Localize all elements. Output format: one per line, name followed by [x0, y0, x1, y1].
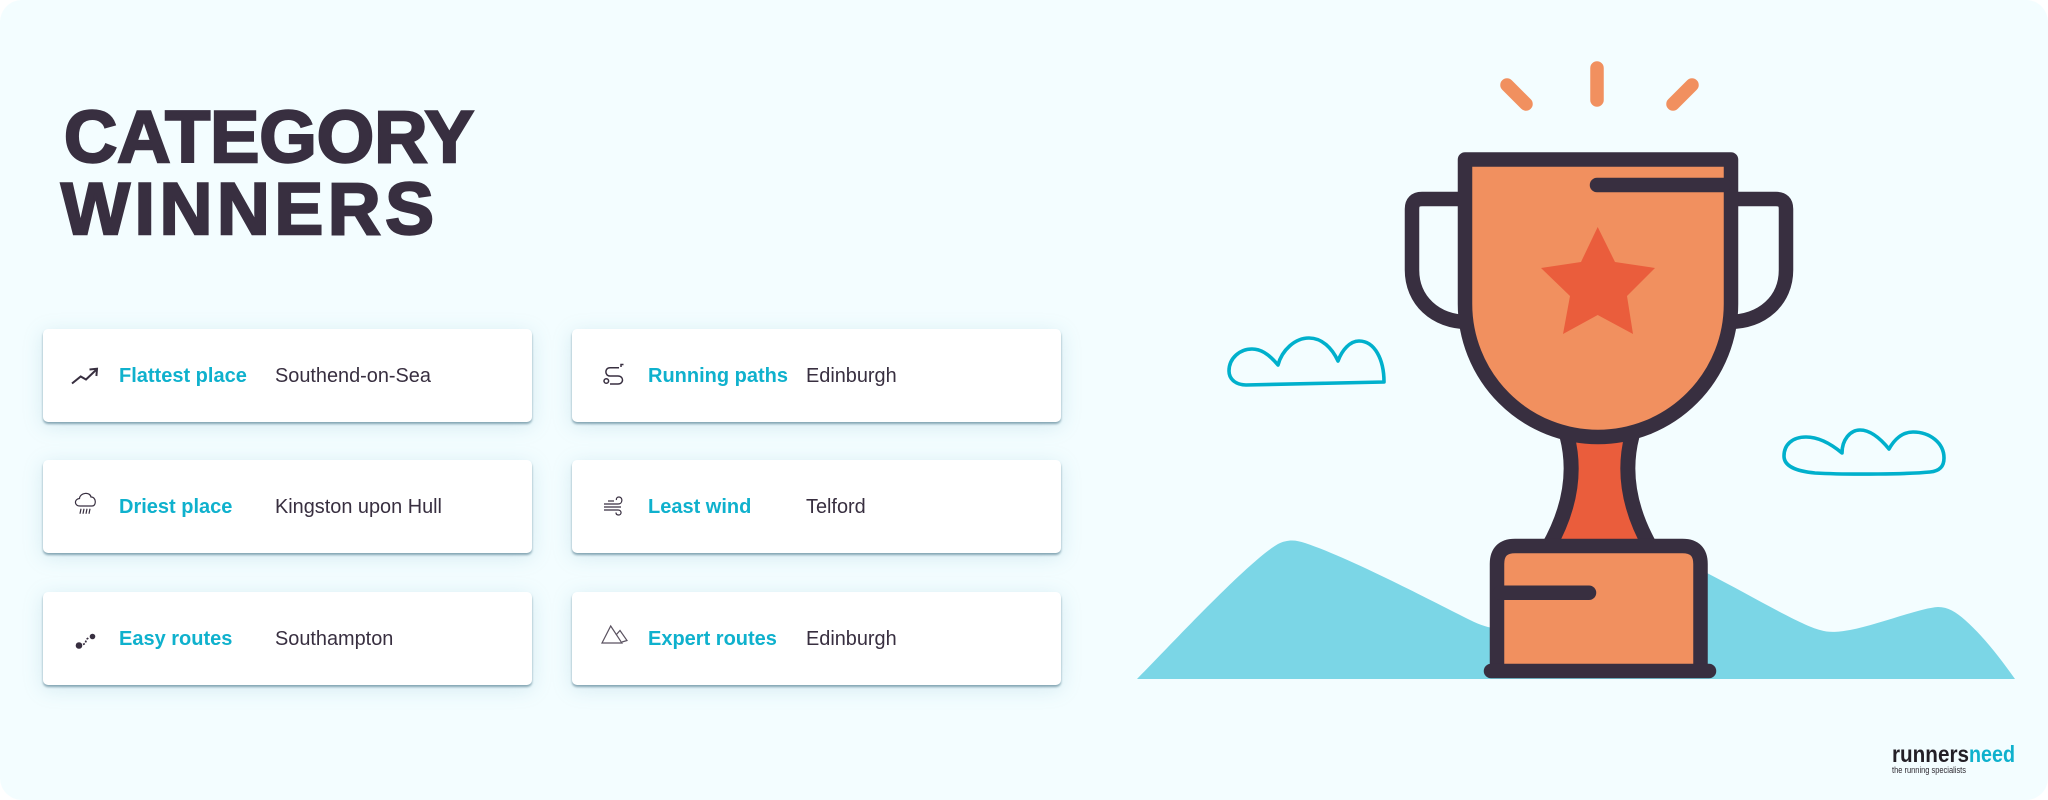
- base bar: [1500, 585, 1589, 600]
- card: least wind: [572, 460, 1061, 553]
- label: Running paths: [648, 365, 788, 387]
- base foot: [1491, 664, 1709, 678]
- value: Telford: [806, 496, 866, 518]
- icon: rain cloud: [74, 492, 96, 514]
- title: [60, 97, 475, 250]
- icon: route dots: [76, 634, 96, 649]
- card: expert routes: [572, 592, 1061, 685]
- value: Edinburgh: [806, 628, 897, 650]
- icon: mountains: [601, 624, 628, 644]
- trophy handles: [1412, 199, 1786, 322]
- card: running paths: [572, 329, 1061, 422]
- logo: need: [1969, 741, 2015, 767]
- sparkle rays: [1507, 68, 1692, 104]
- cloud: right: [1784, 430, 1944, 474]
- trophy cup: [1465, 160, 1731, 437]
- cup highlight bar: [1597, 178, 1724, 192]
- hills: [1137, 540, 2015, 679]
- trophy: [1412, 160, 1786, 671]
- title: CATEGORY: [64, 97, 474, 178]
- card: easy routes: [43, 592, 532, 685]
- star: [1541, 227, 1655, 334]
- trophy stem: [1548, 436, 1651, 548]
- label: Flattest place: [119, 365, 247, 387]
- label: Expert routes: [648, 628, 777, 650]
- logo: runners: [1892, 741, 1969, 767]
- icon: trend arrow: [71, 368, 98, 384]
- cloud: left: [1229, 338, 1384, 385]
- value: Southend-on-Sea: [275, 365, 431, 387]
- label: Driest place: [119, 496, 232, 518]
- value: Southampton: [275, 628, 393, 650]
- card: driest place: [43, 460, 532, 553]
- title: WINNERS: [61, 169, 434, 250]
- icon: winding path: [603, 364, 624, 385]
- card: flattest place: [43, 329, 532, 422]
- trophy base: [1497, 546, 1700, 671]
- value: Kingston upon Hull: [275, 496, 442, 518]
- logo: the running specialists: [1892, 765, 1966, 776]
- label: Least wind: [648, 496, 751, 518]
- value: Edinburgh: [806, 365, 897, 387]
- label: Easy routes: [119, 628, 232, 650]
- icon: wind: [604, 496, 622, 516]
